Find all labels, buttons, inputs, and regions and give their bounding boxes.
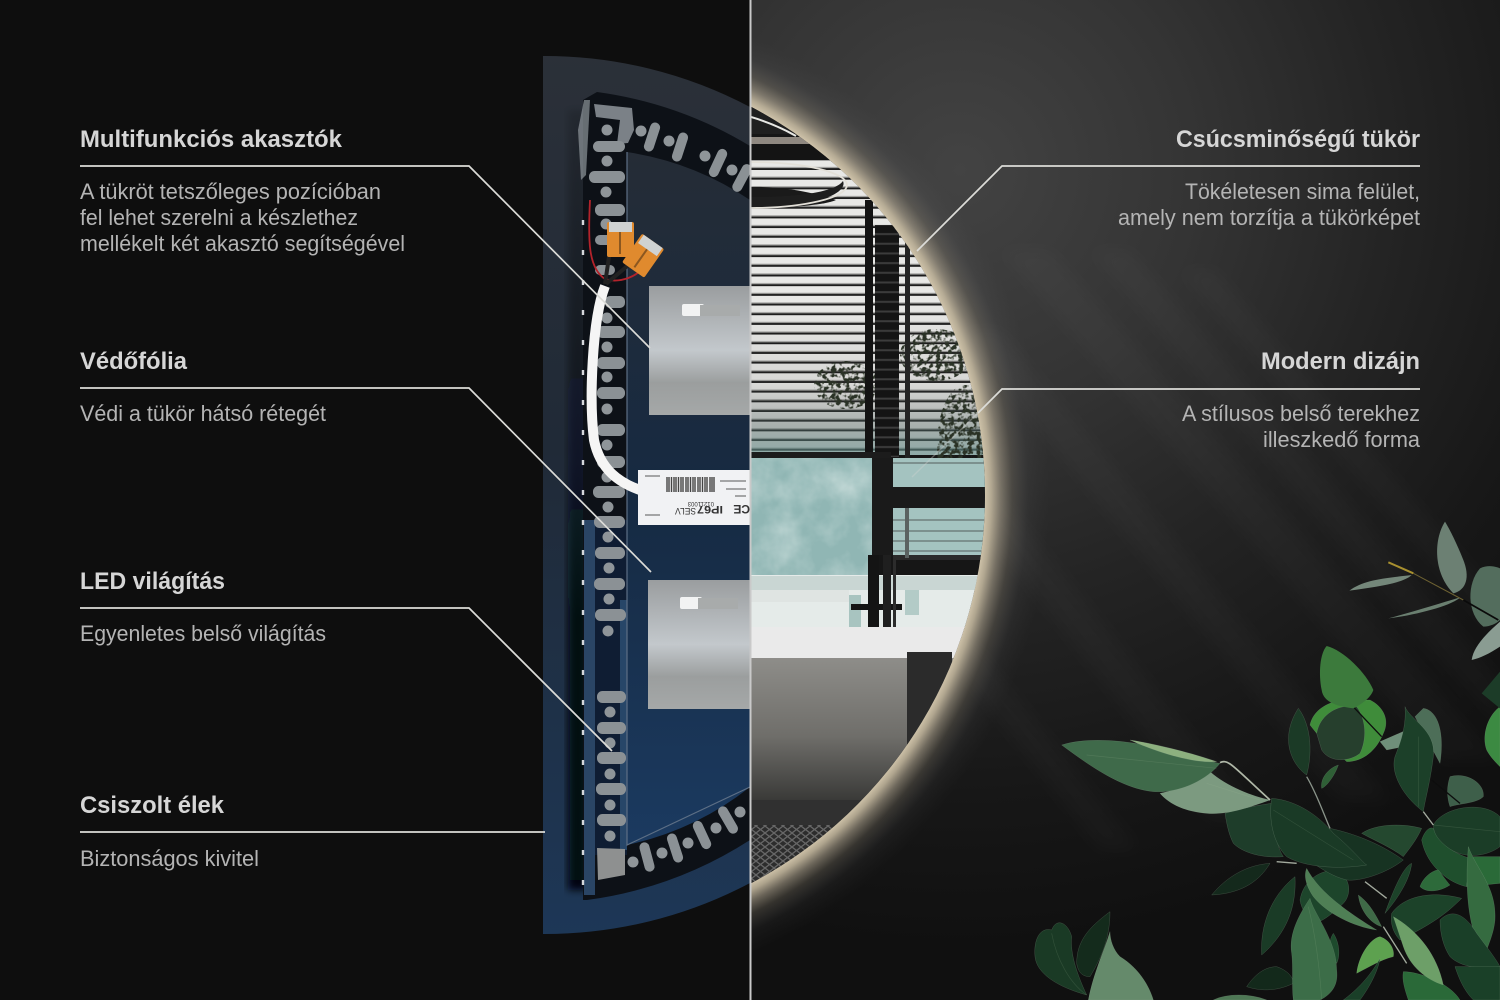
LED driver label bbox=[638, 470, 750, 525]
red and black wires bbox=[589, 200, 641, 284]
description bbox=[1118, 179, 1420, 230]
corner silicone pieces bbox=[594, 104, 634, 880]
black faucet bbox=[851, 555, 902, 627]
silicone bead on corner bbox=[578, 100, 590, 180]
hanger plate lower bbox=[648, 580, 750, 709]
heading: Multifunkciós akasztók bbox=[80, 126, 343, 153]
driver label text: IP67 bbox=[697, 503, 723, 515]
rug bbox=[752, 825, 836, 883]
description: Tökéletesen sima felület, bbox=[1185, 179, 1420, 204]
LED stubs on the lower arc bbox=[628, 805, 746, 873]
white horizon and tub deck bbox=[751, 575, 991, 658]
description: amely nem torzítja a tükörképet bbox=[1118, 205, 1420, 230]
callout: Csúcsminőségű tükör bbox=[917, 126, 1420, 251]
inner panel bbox=[627, 152, 750, 845]
background: right wall with gradient bbox=[751, 0, 1500, 1000]
plant: green leaves bbox=[1035, 700, 1500, 1000]
towel bbox=[907, 652, 952, 745]
plant stems and veins bbox=[1052, 703, 1500, 1000]
description bbox=[1182, 401, 1421, 452]
driver label text: CE bbox=[733, 502, 750, 516]
description: Biztonságos kivitel bbox=[80, 846, 259, 871]
trees behind window bbox=[814, 329, 985, 484]
right window lower panes bbox=[893, 458, 988, 560]
window blinds bbox=[751, 160, 984, 455]
plant: eucalyptus sprig bbox=[1320, 522, 1500, 708]
light rays on wall bbox=[860, 250, 1500, 850]
callout: Csiszolt élek bbox=[80, 792, 545, 871]
mirror with reflected bathroom bbox=[752, 107, 985, 883]
description: fel lehet szerelni a készlethez bbox=[80, 205, 358, 230]
description: A tükröt tetszőleges pozícióban bbox=[80, 179, 381, 204]
callout: Védőfólia bbox=[80, 348, 651, 572]
description: Védi a tükör hátsó rétegét bbox=[80, 401, 326, 426]
heading: Csiszolt élek bbox=[80, 792, 225, 819]
orange connector 2 bbox=[622, 234, 664, 278]
background: left dark half bbox=[0, 0, 750, 1000]
leader line bbox=[80, 831, 545, 833]
heading: Védőfólia bbox=[80, 348, 188, 375]
white power cable bbox=[592, 286, 640, 490]
vertical divider bbox=[750, 0, 752, 1000]
mirror back panel bbox=[543, 50, 753, 940]
LED strip side dashes bbox=[582, 220, 584, 900]
callout: LED világítás bbox=[80, 568, 612, 751]
orange connector 1 bbox=[607, 222, 634, 257]
LED strip channel bbox=[583, 92, 750, 900]
driver label text bbox=[675, 502, 750, 514]
leader line bbox=[80, 166, 650, 348]
panel edge shadow bbox=[568, 110, 588, 890]
ceiling bands bbox=[752, 107, 832, 162]
leader line bbox=[80, 608, 612, 751]
LED stubs on the left strip bbox=[589, 124, 626, 842]
description: mellékelt két akasztó segítségével bbox=[80, 231, 405, 256]
ceiling ring lamp bbox=[752, 161, 848, 209]
floor bbox=[752, 800, 862, 830]
leader line bbox=[978, 389, 1420, 413]
window frames bbox=[752, 200, 910, 458]
leader line bbox=[917, 166, 1420, 251]
LED stubs on the upper arc bbox=[636, 121, 753, 194]
heading: LED világítás bbox=[80, 568, 225, 595]
description bbox=[80, 179, 405, 256]
callout: Modern dizájn bbox=[912, 348, 1421, 477]
blurred clouds outside left bbox=[751, 458, 872, 576]
dark pillar bbox=[872, 458, 893, 555]
heading: Modern dizájn bbox=[1261, 348, 1420, 375]
bathtub bbox=[752, 658, 954, 800]
heading: Csúcsminőségű tükör bbox=[1176, 126, 1420, 153]
driver label text: 01211003 bbox=[687, 500, 714, 506]
leader line bbox=[80, 388, 651, 572]
hanger plate upper bbox=[649, 286, 750, 415]
callout: Multifunkciós akasztók bbox=[80, 126, 650, 348]
driver label text: SELV bbox=[675, 506, 696, 516]
barcode bbox=[667, 477, 714, 492]
description: illeszkedő forma bbox=[1263, 427, 1421, 452]
blind lower fade bbox=[752, 335, 984, 455]
description: Egyenletes belső világítás bbox=[80, 621, 326, 646]
description: A stílusos belső terekhez bbox=[1182, 401, 1420, 426]
wall glow of the LED mirror bbox=[751, 0, 1081, 1000]
